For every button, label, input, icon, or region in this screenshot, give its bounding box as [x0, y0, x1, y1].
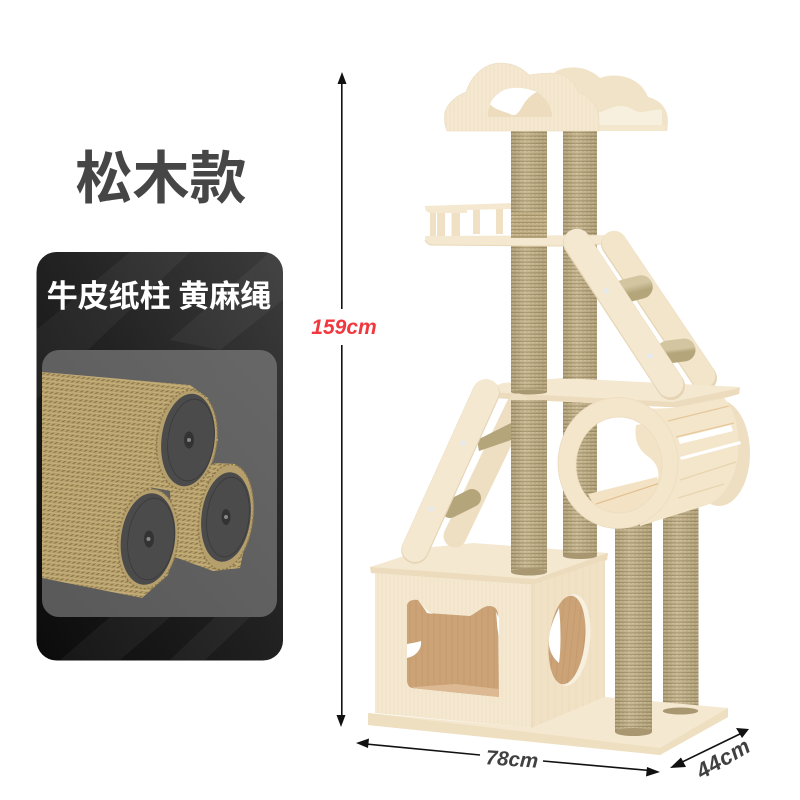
arrow: width	[356, 738, 660, 776]
cat-shaped door	[407, 600, 499, 697]
post segment above upper shelf	[511, 212, 547, 238]
roll: back right	[170, 461, 259, 573]
rung: lower-left top	[477, 423, 511, 451]
side face	[532, 560, 605, 728]
arrow: depth	[670, 728, 749, 768]
roll: top	[42, 372, 223, 493]
label: width: 78cm	[485, 746, 539, 773]
post: right front	[615, 510, 652, 736]
panel background	[36, 252, 283, 660]
cat tree	[368, 63, 750, 755]
barrel interior	[588, 424, 659, 513]
rung: upper	[625, 287, 641, 291]
ladder: lower front plank	[415, 392, 486, 550]
post: right rear	[663, 495, 698, 711]
panel: material	[36, 252, 283, 660]
title: 松木款	[76, 147, 246, 211]
barrel body	[640, 398, 750, 526]
rung: lower	[668, 350, 684, 352]
shelf	[425, 235, 622, 246]
rung: lower-left bottom	[450, 498, 472, 509]
box top platform	[370, 543, 608, 585]
barrel tunnel	[558, 398, 750, 528]
back cloud platform	[555, 67, 668, 131]
railing top	[425, 203, 511, 213]
side round hole	[544, 592, 595, 688]
post: front centre	[511, 131, 547, 573]
railing posts	[430, 208, 503, 236]
post on box: rear	[563, 520, 597, 559]
house box	[375, 560, 605, 728]
panel heading: 牛皮纸柱 黄麻绳	[47, 279, 271, 314]
front face	[375, 573, 532, 728]
post on box: front	[511, 400, 547, 576]
ladder: upper front plank	[577, 242, 671, 386]
ladder: lower back plank	[455, 405, 518, 536]
arrow: height	[336, 72, 346, 727]
ladder: upper back plank	[614, 243, 704, 378]
material photo	[42, 350, 277, 617]
label: height: 159cm	[311, 316, 377, 339]
front cloud platform	[444, 63, 599, 131]
middle platform	[488, 378, 740, 408]
upper platform with railing	[425, 203, 622, 246]
label: depth: 44cm	[691, 733, 755, 784]
cloud cut-out	[488, 88, 552, 117]
roll: bottom front	[42, 467, 184, 598]
base board	[368, 697, 728, 755]
post segments above middle shelf	[511, 330, 597, 394]
post: rear centre	[563, 131, 597, 558]
barrel front ring	[558, 398, 678, 528]
